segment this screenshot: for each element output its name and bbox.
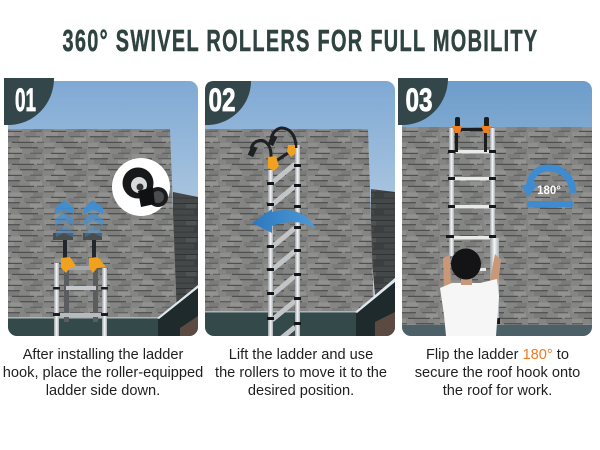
icon: 180 degree rotation: 180° [537, 185, 561, 197]
text: step 3 description: the roof for work. [443, 383, 552, 399]
arrow: blue curved left [252, 209, 316, 233]
ladder with roof hooks [248, 128, 301, 346]
text: step 3 description: secure the roof hook onto [415, 365, 580, 381]
panel: step 3 photo [402, 81, 592, 336]
ladder [446, 117, 500, 324]
text: step 2 description: desired position. [248, 383, 354, 399]
text: step 1 description: After installing the ladder [23, 347, 183, 363]
text: step 1 description: hook, place the roller-equipped [3, 365, 203, 381]
panel: step 1 photo [8, 81, 198, 336]
text: step 3 description: Flip the ladder 180° to [426, 347, 569, 363]
ladder with hook [53, 233, 108, 336]
icon: blue upward chevrons [55, 200, 103, 237]
badge: 01: 01 [15, 82, 36, 118]
panel: step 2 photo [205, 81, 395, 346]
text: step 2 description: the rollers to move it to the [215, 365, 387, 381]
badge: 02 [205, 81, 251, 125]
person holding ladder [440, 248, 501, 336]
badge: 03: 03 [406, 82, 432, 118]
badge: 01 [4, 78, 54, 125]
badge: 02: 02 [208, 82, 236, 118]
icon: roller wheel callout [112, 158, 170, 216]
badge: 03 [398, 78, 448, 125]
icon: 180 degree rotation [521, 168, 573, 207]
text: step 2 description: Lift the ladder and use [229, 347, 373, 363]
text: step 1 description: ladder side down. [46, 383, 160, 399]
